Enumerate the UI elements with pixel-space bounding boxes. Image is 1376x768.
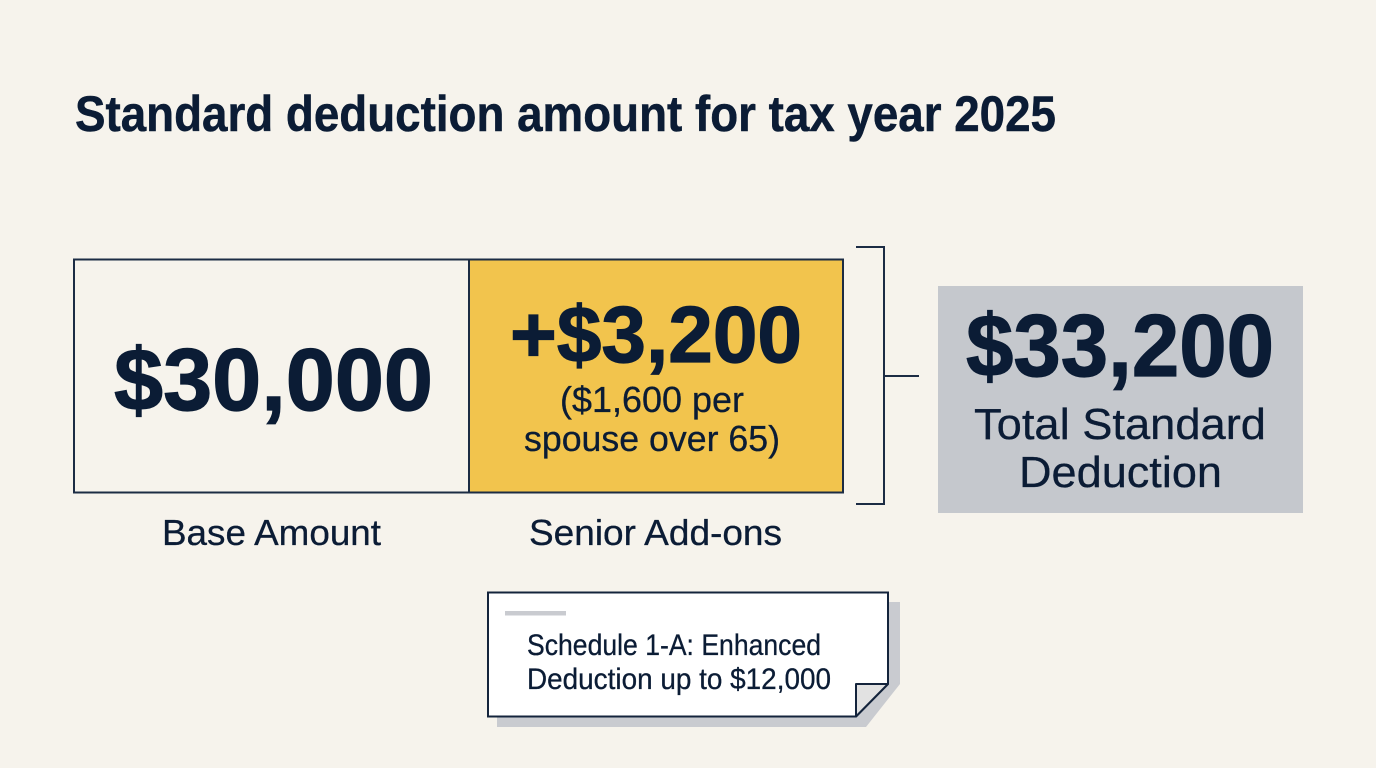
bracket connecting amounts to total [856,247,919,504]
panel: base amount [74,260,469,492]
total label: Deduction [1019,448,1222,497]
senior add-on detail: spouse over 65) [524,418,780,459]
title: Standard deduction amount for tax year 2025 [75,86,1056,142]
label: senior add-ons: Senior Add-ons [529,512,782,553]
label: base amount: Base Amount [162,512,381,553]
senior add-on value: +$3,200 [510,290,802,379]
total value: $33,200 [966,296,1274,395]
callout text [527,629,831,696]
callout text: Deduction up to $12,000 [527,663,831,696]
panel: senior add-ons [469,260,843,492]
total label [974,400,1266,497]
base amount value: $30,000 [114,330,433,429]
senior add-on detail: ($1,600 per [560,379,744,420]
senior add-on detail [524,379,780,459]
page fold icon [856,684,888,716]
total label: Total Standard [974,400,1266,449]
callout: Schedule 1-A note [488,592,900,727]
callout text: Schedule 1-A: Enhanced [527,629,821,662]
panel: total standard deduction [938,286,1303,513]
